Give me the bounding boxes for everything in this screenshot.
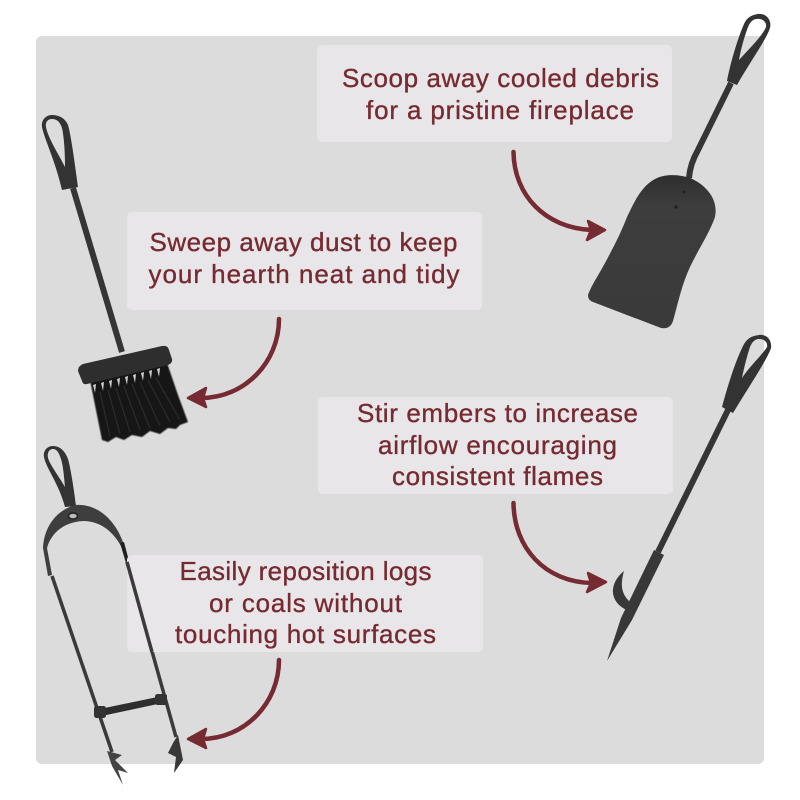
arrow: shovel [514, 152, 605, 240]
arrow: tongs [188, 660, 279, 748]
callout: brush: your hearth neat and tidy [148, 259, 460, 289]
callout: poker: consistent flames [392, 461, 603, 491]
arrow: poker [514, 503, 606, 592]
callout: tongs [127, 555, 483, 652]
callout: poker: airflow encouraging [378, 430, 617, 460]
callout: tongs: Easily reposition logs [180, 556, 432, 586]
icon: shovel [588, 14, 770, 328]
callout: brush [127, 212, 482, 310]
icon: poker [607, 335, 771, 661]
callout: tongs: or coals without [209, 588, 403, 618]
icon: brush [42, 115, 188, 442]
icon: fire tongs [43, 446, 183, 785]
callout: poker: Stir embers to increase [357, 398, 638, 428]
callout: shovel: for a pristine fireplace [366, 95, 634, 125]
callout: poker [318, 397, 673, 494]
callout: shovel: Scoop away cooled debris [342, 63, 659, 93]
tongs arm over callout [127, 562, 152, 652]
callout: shovel [317, 45, 672, 142]
callout: tongs: touching hot surfaces [175, 619, 436, 649]
callout: brush: Sweep away dust to keep [150, 227, 458, 257]
arrow: brush [188, 319, 279, 407]
